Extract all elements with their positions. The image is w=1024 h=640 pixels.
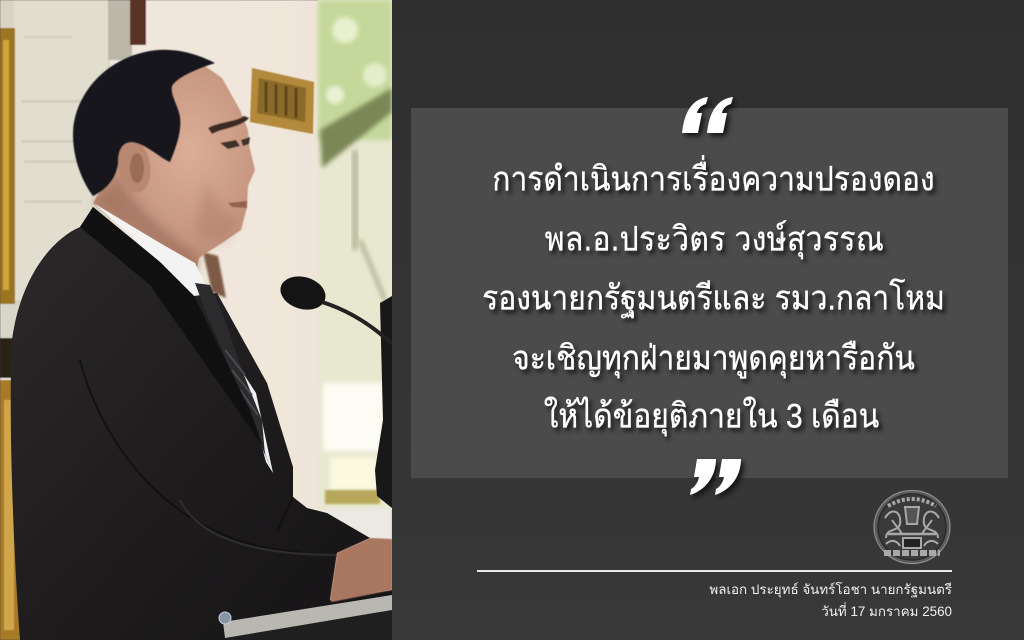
icon: government seal bbox=[873, 490, 951, 564]
caption: speaker and date: วันที่ 17 มกราคม 2560 bbox=[821, 604, 952, 619]
photo background: garden through opening bbox=[318, 0, 392, 540]
closing quote mark bbox=[690, 459, 746, 498]
caption: speaker and date bbox=[709, 582, 952, 619]
black suit bbox=[11, 207, 392, 640]
quote line 2: พล.อ.ประวิตร วงษ์สุวรรณ bbox=[545, 221, 884, 259]
quote line 1: การดำเนินการเรื่องความปรองดอง bbox=[492, 161, 935, 199]
suit lapel and folds bbox=[80, 207, 337, 555]
quote line 4: จะเชิญทุกฝ่ายมาพูดคุยหารือกัน bbox=[512, 340, 915, 378]
opening quote mark bbox=[682, 97, 736, 139]
photo background: interior wall bbox=[0, 0, 392, 640]
white shirt collar bbox=[95, 204, 204, 296]
quote box bbox=[411, 108, 1008, 478]
figure behind at right bbox=[375, 296, 392, 508]
neck, face and ear bbox=[93, 66, 255, 275]
background person hair bbox=[203, 252, 226, 298]
hand bbox=[330, 538, 392, 602]
shirt front and tie bbox=[195, 283, 273, 473]
microphone bbox=[276, 271, 392, 344]
lectern bbox=[219, 595, 392, 640]
quote line 5: ให้ได้ข้อยุติภายใน 3 เดือน bbox=[544, 398, 879, 436]
divider line bbox=[477, 570, 952, 572]
hair bbox=[73, 50, 215, 196]
dark panel bbox=[392, 0, 1024, 640]
quote line 3: รองนายกรัฐมนตรีและ รมว.กลาโหม bbox=[482, 280, 945, 318]
caption: speaker and date: พลเอก ประยุทธ์ จันทร์โอชา นายกรัฐมนตรี bbox=[709, 582, 952, 597]
wooden name plaque bbox=[250, 68, 314, 134]
photo: speaker at podium bbox=[0, 0, 392, 640]
